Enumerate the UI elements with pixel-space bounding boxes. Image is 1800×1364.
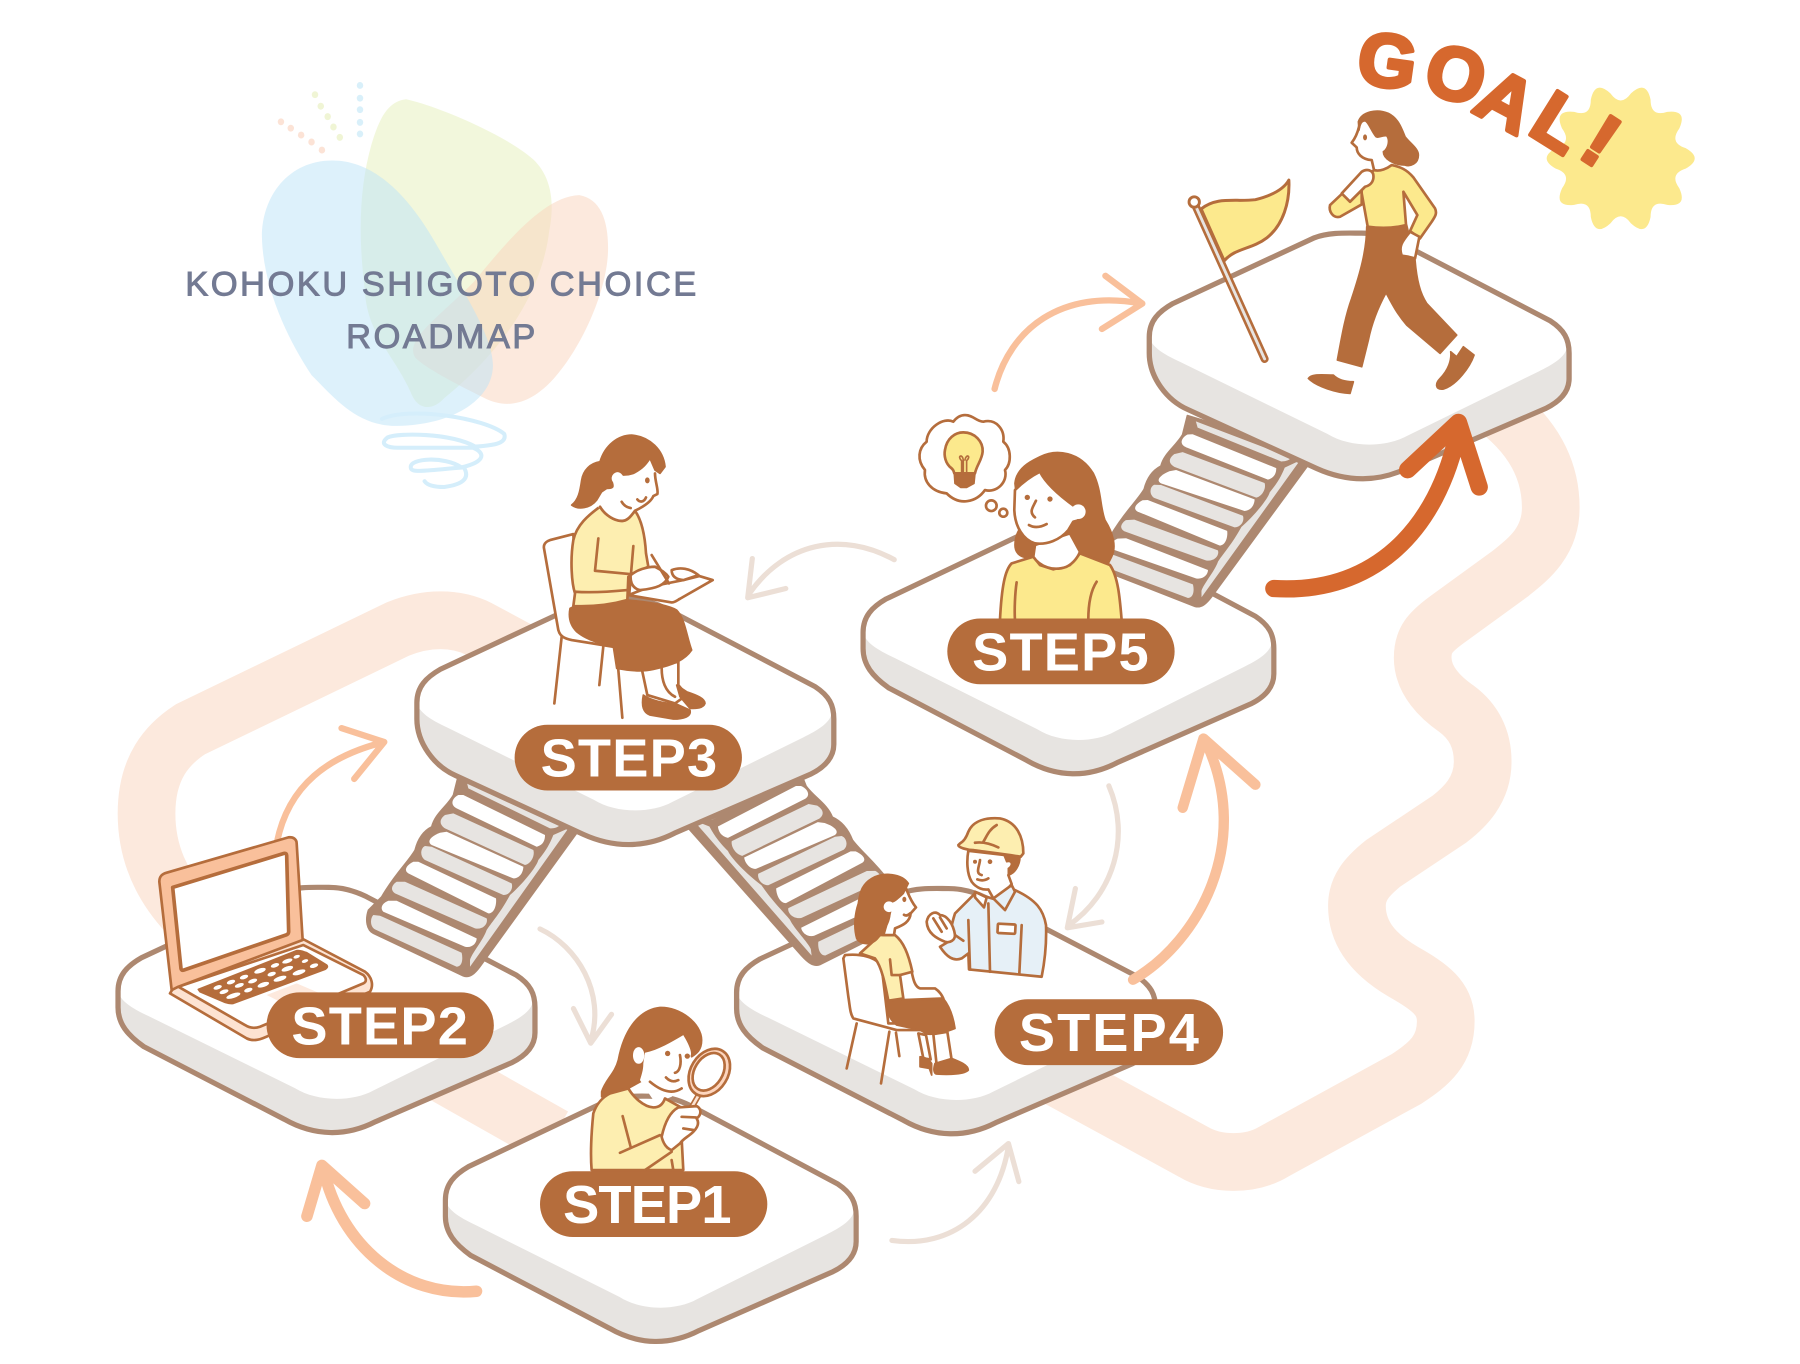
title backdrop blobs <box>262 99 608 426</box>
blob: blue <box>262 160 493 426</box>
arrow: step 5 to step 3 <box>748 544 894 598</box>
heading: GOAL!: A <box>1463 51 1550 150</box>
platform: goal <box>1149 232 1569 479</box>
arrow: step 4 to step 5 <box>1133 739 1255 980</box>
character: woman writing on step 3 <box>544 435 713 719</box>
background road: left loop band <box>147 620 554 1137</box>
label: step 2: STEP2 <box>291 996 468 1056</box>
arrow: step 5 to goal <box>995 276 1142 389</box>
arrow: step 1 to step 4 <box>892 1144 1019 1242</box>
stairs: step 5 to goal <box>1094 409 1310 612</box>
heading: GOAL!: O <box>1417 26 1495 122</box>
label: step 1: STEP1 <box>563 1175 732 1235</box>
character: woman thinking on step 5 <box>1000 453 1122 620</box>
heading: GOAL!: ! <box>1568 98 1635 183</box>
label: step 5: STEP5 <box>972 622 1149 682</box>
blob: peach <box>413 195 608 404</box>
squiggle <box>382 414 505 487</box>
title: KOHOKU SHIGOTO CHOICE <box>185 265 696 303</box>
arrow: step 5 to step 4 <box>1067 786 1118 928</box>
arrow: step 2 to step 3 <box>277 728 384 842</box>
background road: right winding band <box>1038 398 1551 1162</box>
platform: step 4 <box>737 887 1156 1134</box>
platform: step 2 <box>118 886 535 1133</box>
character: woman walking to goal <box>1308 111 1474 393</box>
icon: thought bubble with light bulb <box>919 415 1010 517</box>
title: ROADMAP <box>346 318 535 356</box>
heading: GOAL!: L <box>1517 74 1601 170</box>
characters: woman and worker on step 4 <box>843 818 1046 1083</box>
title <box>185 265 696 356</box>
starburst <box>1547 88 1695 229</box>
label: step 3: STEP3 <box>541 729 717 789</box>
stairs: step 2 to step 3 <box>367 775 577 977</box>
platform: step 3 <box>417 598 834 845</box>
stairs: step 3 to step 4 <box>678 765 918 967</box>
label: step 1 <box>540 1171 767 1237</box>
icon: goal flag <box>1189 180 1289 359</box>
character: laptop on step 2 <box>159 837 372 1040</box>
decorative dots <box>278 82 363 154</box>
platform: step 1 <box>445 1095 856 1341</box>
character: woman on step 1 with magnifier <box>591 1007 739 1170</box>
platform: step 5 <box>863 527 1274 774</box>
heading: GOAL! <box>1353 15 1635 183</box>
blob: green <box>361 99 552 407</box>
arrow: step 3 to step 1 <box>540 929 612 1043</box>
arrow: step 1 to step 2 <box>307 1165 477 1292</box>
arrow: to goal <box>1274 422 1479 589</box>
label: step 4: STEP4 <box>1019 1003 1199 1063</box>
heading: GOAL!: G <box>1353 15 1422 106</box>
